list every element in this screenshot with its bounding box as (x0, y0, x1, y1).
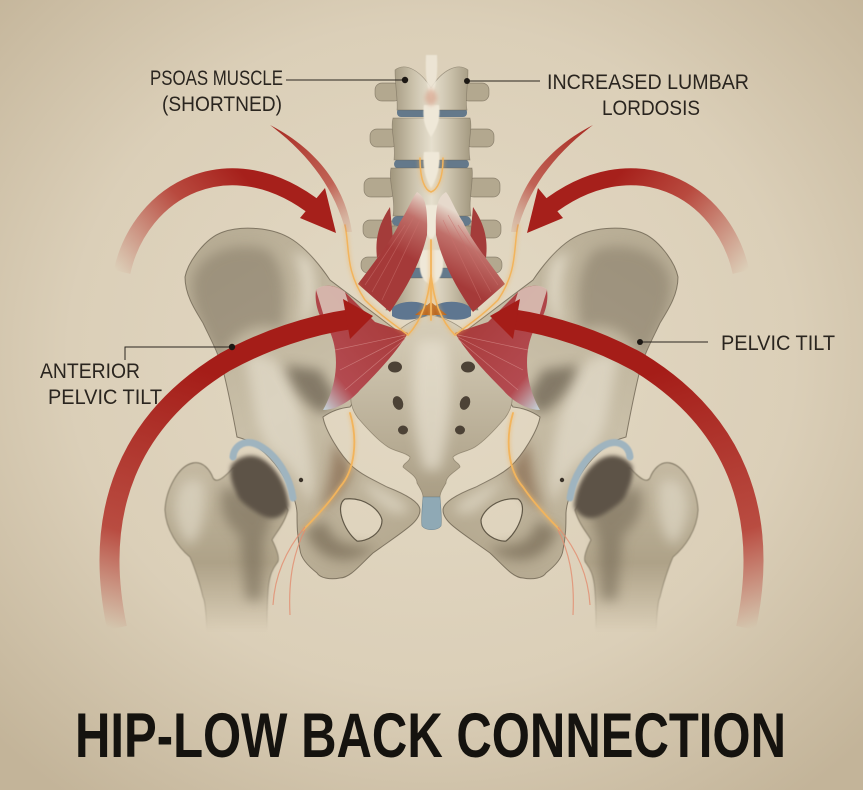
coccyx (422, 497, 441, 530)
psoas muscles (358, 192, 505, 312)
left half of pelvis and femur (165, 228, 420, 632)
spinous processes (420, 55, 443, 285)
arrow: upper left arc (122, 177, 336, 272)
label: psoas muscle (150, 67, 408, 116)
left hip joint cartilage (233, 443, 293, 498)
label: increased lumbar lordosis (464, 71, 749, 120)
label: pelvic tilt: PELVIC TILT (721, 332, 835, 355)
left femur (165, 456, 289, 632)
right iliacus muscle (455, 286, 547, 410)
nerve lines (303, 158, 560, 530)
sacral foramina (388, 362, 475, 434)
label: pelvic tilt (637, 332, 835, 355)
pink tint on upper spinous process (425, 88, 437, 106)
vertebral bodies (386, 67, 478, 310)
arrow: thin left curve (270, 125, 352, 232)
arrow: lower left big arc (110, 299, 373, 628)
right arrows (490, 125, 753, 628)
label: psoas muscle: PSOAS MUSCLE (150, 67, 283, 90)
label: increased lumbar lordosis: LORDOSIS (602, 97, 700, 120)
lower disc (392, 302, 471, 320)
left arrows (110, 125, 373, 628)
label: anterior pelvic tilt: ANTERIOR (40, 360, 140, 383)
labels (40, 67, 835, 409)
label: anterior pelvic tilt: PELVIC TILT (48, 386, 162, 409)
label: increased lumbar lordosis: INCREASED LUMBAR (547, 71, 749, 94)
sciatic nerve branches (273, 527, 590, 615)
right half of pelvis and femur (443, 228, 698, 632)
left iliacus muscle (316, 286, 408, 410)
discs (392, 108, 471, 278)
obturator foramen edge (341, 499, 382, 541)
transverse processes (361, 83, 502, 273)
sacrum (351, 315, 512, 530)
lumbar spine (361, 55, 502, 320)
left ilium and ischium (185, 228, 420, 579)
label: psoas muscle: (SHORTNED) (162, 93, 282, 116)
label: anterior pelvic tilt (40, 344, 235, 409)
